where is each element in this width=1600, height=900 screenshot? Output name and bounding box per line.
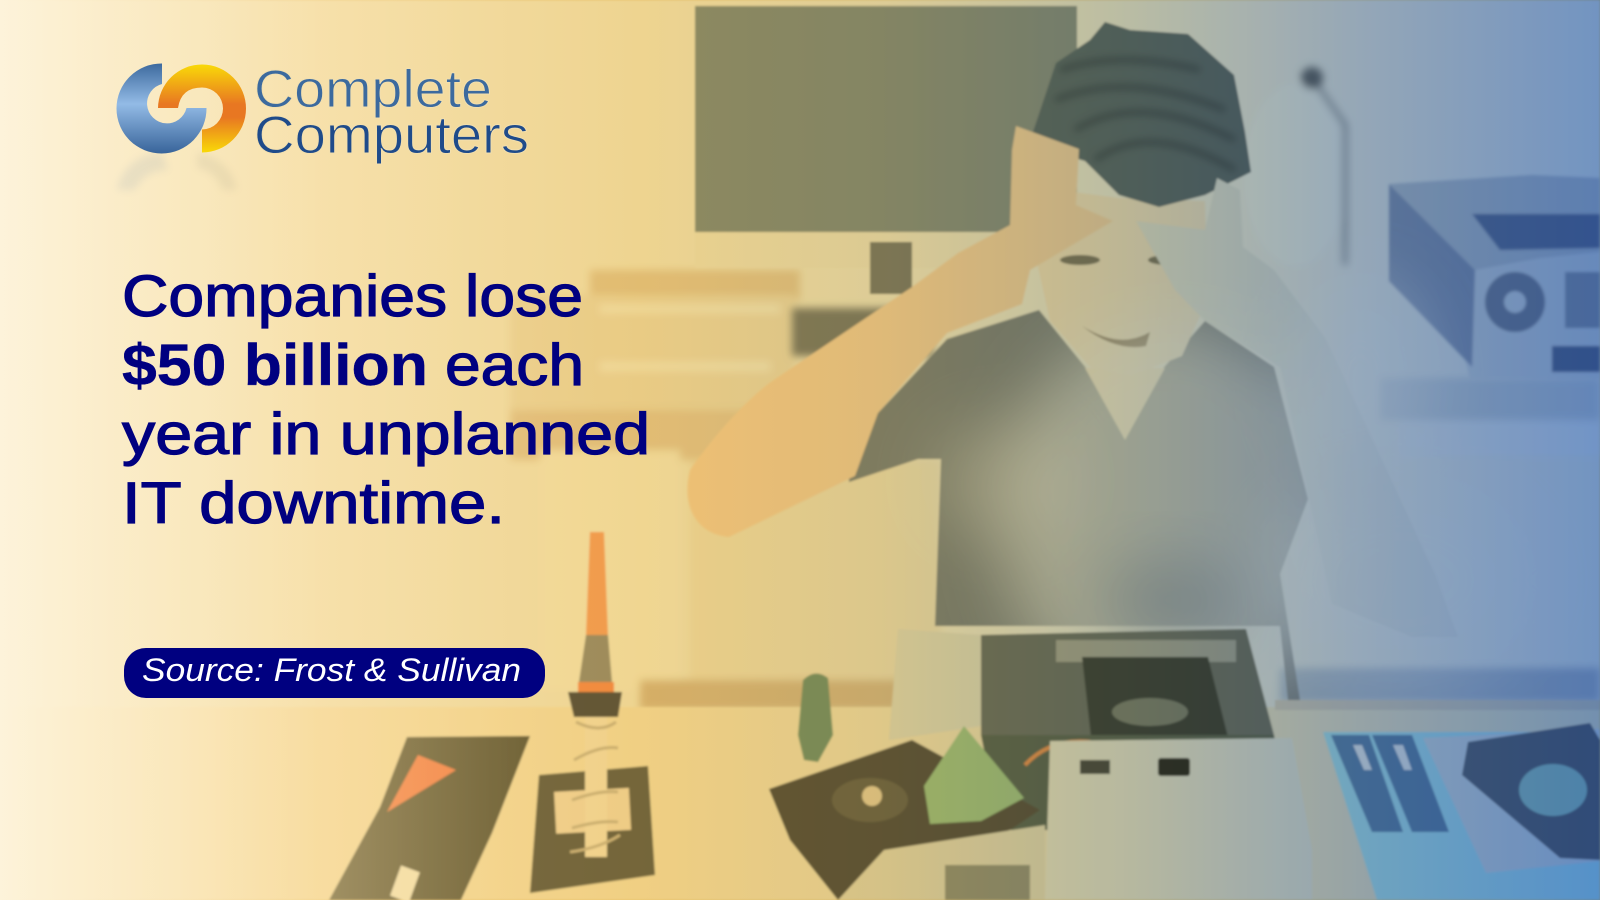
lamp — [1243, 67, 1347, 267]
headline line 4: IT downtime. — [122, 471, 505, 536]
fan — [1082, 657, 1228, 737]
table — [0, 700, 1600, 900]
soldering iron and stand — [530, 532, 655, 893]
headline line 1: Companies lose — [122, 264, 583, 329]
headline — [122, 264, 650, 536]
grille panel — [838, 825, 1045, 900]
case front silver — [1045, 738, 1312, 900]
motherboard and cables — [981, 735, 1290, 830]
shirt — [849, 310, 1308, 700]
case interior — [981, 629, 1274, 735]
headline line 3: year in unplanned — [122, 402, 650, 467]
hair — [1033, 22, 1251, 207]
smoke — [930, 280, 1540, 720]
desk and shelves behind — [510, 270, 940, 710]
neck — [1085, 368, 1165, 440]
monitor — [695, 6, 1077, 356]
source text: Source: Frost & Sullivan — [142, 652, 521, 688]
man — [687, 22, 1458, 700]
headline line 2 end: each — [445, 333, 584, 398]
right arm and hand — [1136, 178, 1458, 637]
open computer case — [769, 629, 1312, 900]
case left panel — [889, 629, 981, 740]
face — [1036, 189, 1208, 376]
green circuit board — [924, 726, 1024, 824]
logo word: Complete: Complete — [254, 60, 492, 119]
source pill — [124, 648, 545, 698]
logo: Complete Computers — [117, 60, 529, 190]
front panel on table — [329, 736, 530, 900]
right background shelf and floor — [1280, 378, 1600, 702]
logo mark: orange arc — [158, 65, 246, 152]
blue mat with RAM and drive — [1323, 723, 1600, 900]
left arm and hand — [687, 126, 1113, 537]
screwdriver — [798, 673, 833, 762]
logo mark: blue arc — [117, 63, 207, 153]
hard drive — [769, 740, 1040, 900]
headline line 2 bold: $50 billion — [122, 333, 428, 398]
left cream fade — [0, 0, 720, 900]
computer tower on right — [1389, 175, 1600, 379]
logo word: Computers: Computers — [254, 106, 529, 165]
logo reflection — [117, 153, 237, 190]
